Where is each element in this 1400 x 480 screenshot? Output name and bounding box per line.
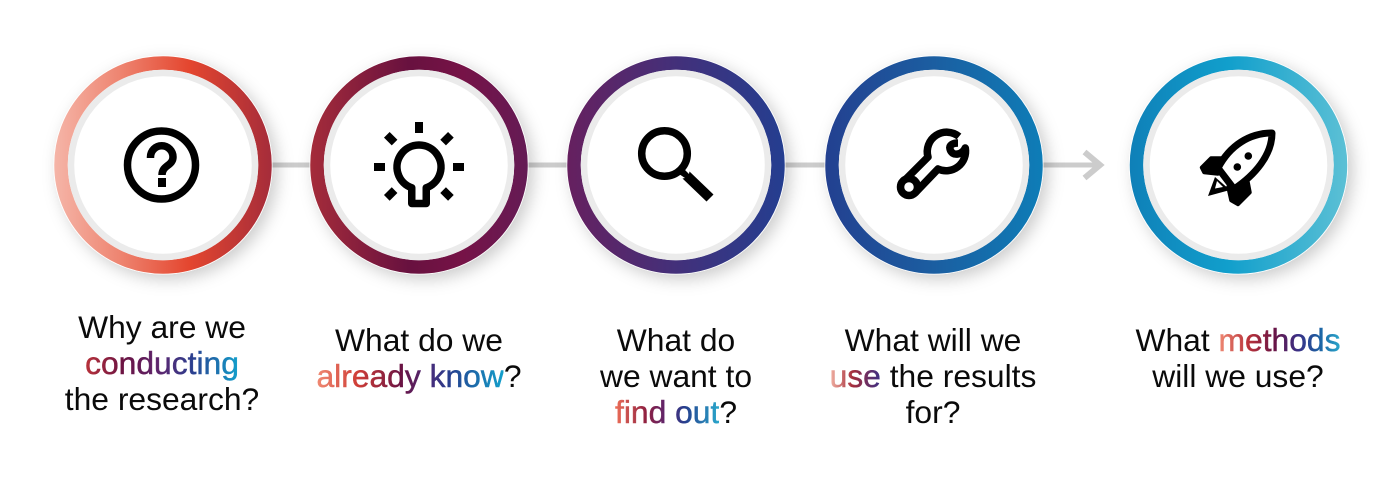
ring: step 4 xyxy=(824,56,1044,274)
icon: magnifying glass xyxy=(642,131,714,202)
ring: step 5 xyxy=(1129,56,1348,274)
caption: what methods will we use: will we use? xyxy=(1152,358,1324,394)
caption: what do we want to find out: find out? xyxy=(615,394,737,430)
caption: what methods will we use: What methods xyxy=(1135,322,1341,358)
caption: why conducting research xyxy=(65,309,259,417)
icon: wrench xyxy=(900,132,966,196)
icon: rocket xyxy=(1202,133,1272,204)
caption: what do we want to find out xyxy=(600,322,752,430)
connector: step 3 to step 4 xyxy=(781,162,829,168)
caption: what do we already know xyxy=(316,322,522,394)
connector: step 2 to step 3 xyxy=(524,162,572,168)
caption: what do we already know: What do we xyxy=(335,322,503,358)
ring: step 2 xyxy=(310,56,528,274)
caption: what will we use the results for: What will we xyxy=(845,322,1021,358)
icon: question mark xyxy=(128,131,196,199)
caption: what do we already know: already know? xyxy=(316,358,522,394)
caption: why conducting research: conducting xyxy=(85,345,239,381)
arrow: step 4 to step 5 xyxy=(1040,152,1100,178)
caption: why conducting research: the research? xyxy=(65,381,259,417)
caption: what will we use the results for xyxy=(830,322,1036,430)
caption: why conducting research: Why are we xyxy=(78,309,246,345)
caption: what will we use the results for: use the results xyxy=(830,358,1036,394)
icon: light bulb xyxy=(374,122,464,204)
connector: step 1 to step 2 xyxy=(268,162,314,168)
caption: what do we want to find out: What do xyxy=(617,322,735,358)
ring: step 3 xyxy=(566,56,786,274)
ring: step 1 xyxy=(54,56,272,274)
caption: what will we use the results for: for? xyxy=(906,394,960,430)
caption: what methods will we use xyxy=(1135,322,1341,394)
caption: what do we want to find out: we want to xyxy=(600,358,752,394)
